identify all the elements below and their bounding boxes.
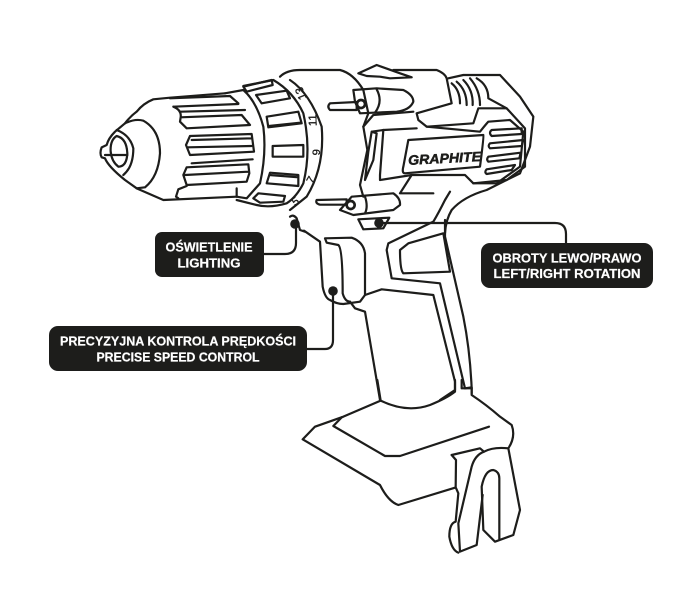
label text: lighting (166, 240, 252, 270)
battery base and clip (303, 380, 520, 553)
connector line: speed control (307, 292, 333, 349)
motor housing (280, 65, 533, 233)
connector line: lighting (264, 225, 296, 254)
motor housing: 13 (294, 85, 309, 101)
brand logo: GRAPHITE (408, 149, 482, 168)
motor housing: 11 (307, 114, 320, 126)
label text: rotation (492, 252, 642, 281)
marker dot: speed control (328, 286, 338, 296)
label box: lighting (155, 232, 264, 277)
motor housing: 5 (290, 195, 302, 209)
label box: rotation (481, 243, 653, 288)
label box: speed control (49, 326, 307, 371)
connector line: rotation (379, 223, 566, 244)
motor housing: 9 (311, 149, 323, 155)
callout: precise speed control (49, 286, 338, 371)
chuck and gear collar (100, 80, 307, 206)
label text: rotation: LEFT/RIGHT ROTATION (494, 267, 640, 281)
label text: lighting: LIGHTING (178, 256, 240, 270)
marker dot: rotation (374, 218, 384, 228)
label text: speed control: PRECYZYJNA KONTROLA PRĘDKOŚCI (60, 334, 296, 348)
label text: lighting: OŚWIETLENIE (166, 240, 252, 254)
motor housing: 7 (305, 175, 318, 186)
label text: rotation: OBROTY LEWO/PRAWO (492, 252, 642, 266)
marker dot: lighting (290, 219, 300, 229)
callout: left/right rotation (374, 218, 653, 288)
label text: speed control (60, 334, 296, 364)
label text: speed control: PRECISE SPEED CONTROL (96, 350, 260, 364)
callout: lighting (155, 219, 300, 277)
handle and trigger (304, 192, 472, 400)
drill illustration (100, 65, 533, 553)
